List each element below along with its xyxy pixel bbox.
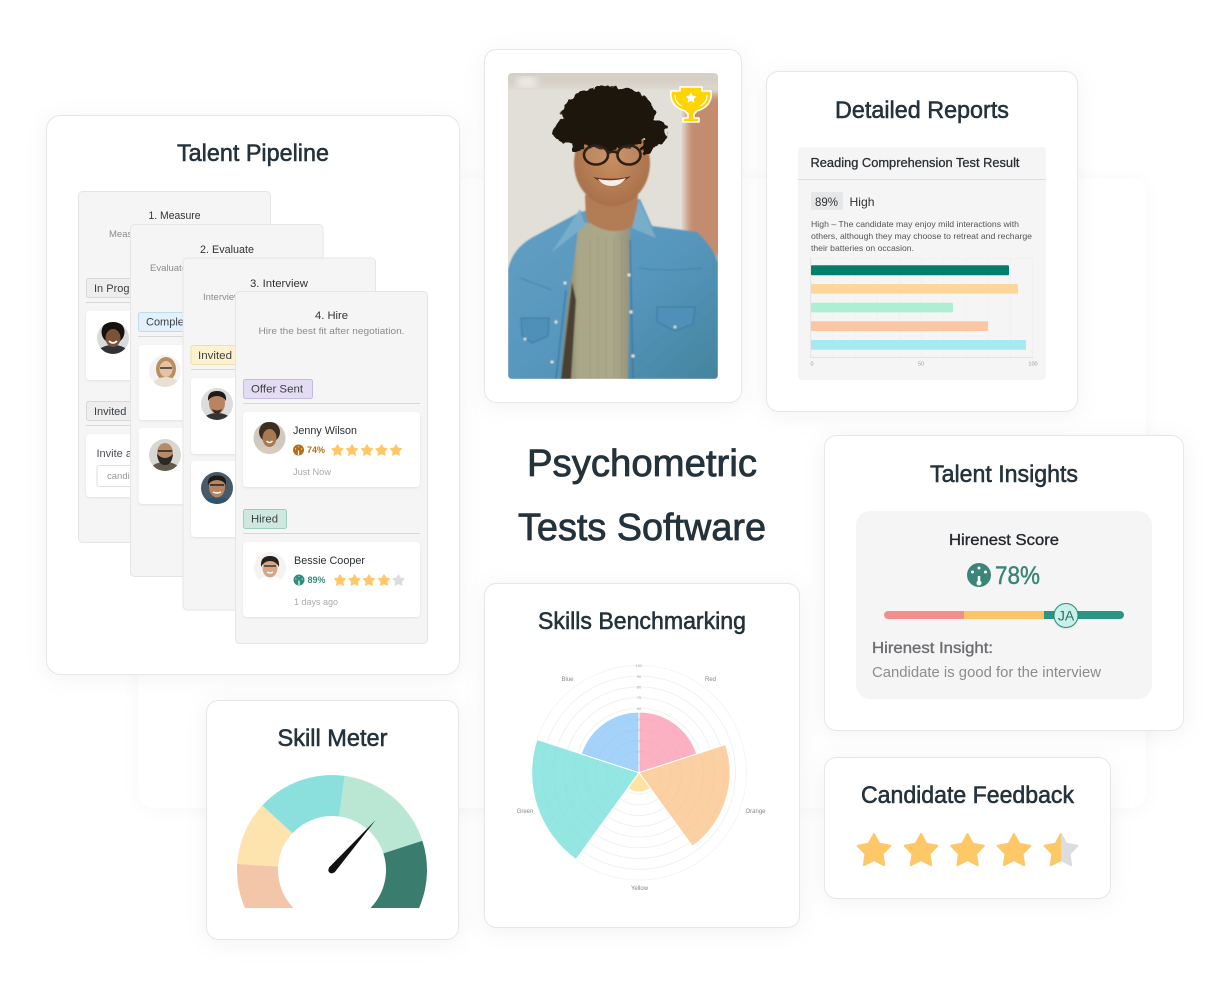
avatar: candidate 4 bbox=[201, 388, 233, 420]
smile bbox=[593, 176, 631, 182]
report card: High bbox=[850, 195, 874, 209]
column: hire: 4. Hire bbox=[315, 310, 348, 322]
candidate card: jenny wilson: Jenny Wilson bbox=[293, 425, 357, 437]
column: interview: Interview the candidates bbox=[203, 292, 306, 303]
avatar: candidate 2 bbox=[149, 355, 181, 387]
t-shirt bbox=[561, 222, 630, 379]
column: measure bbox=[78, 192, 270, 542]
polar area chart: 40 bbox=[637, 728, 642, 732]
tag: hired: Hired bbox=[251, 514, 278, 526]
score bar: JA bbox=[1058, 608, 1075, 624]
glasses bbox=[584, 146, 640, 164]
heading: skill meter: Skill Meter bbox=[278, 725, 388, 752]
column: measure: Invited bbox=[94, 406, 126, 418]
candidate card: jenny wilson: Just Now bbox=[293, 467, 332, 477]
polar area chart: 10 bbox=[637, 760, 642, 765]
hirenest score box bbox=[856, 511, 1152, 699]
candidate card: bessie cooper: 89% bbox=[308, 575, 326, 586]
column: evaluate: Completed bbox=[146, 316, 199, 328]
icon: score gauge bbox=[967, 563, 991, 587]
heading: talent pipeline: Talent Pipeline bbox=[177, 140, 329, 167]
hirenest score box: Hirenest Score bbox=[949, 532, 1059, 549]
tag: offer sent bbox=[244, 380, 312, 398]
hirenest score box: Hirenest Insight: bbox=[872, 640, 993, 657]
bar chart: 50 bbox=[918, 362, 924, 368]
needle bbox=[328, 820, 376, 873]
panel: talent insights bbox=[824, 436, 1184, 730]
polar area chart: 50 bbox=[637, 717, 642, 722]
description: High – The candidate may enjoy mild interactions with bbox=[811, 219, 1019, 229]
hair bbox=[554, 86, 667, 154]
polar area chart: Green bbox=[517, 809, 533, 815]
polar area chart: 30 bbox=[637, 738, 642, 744]
bar chart: 0 bbox=[810, 362, 814, 368]
bar chart: 100 bbox=[1028, 362, 1038, 368]
column: evaluate bbox=[130, 224, 323, 576]
polar area chart: Yellow bbox=[631, 886, 649, 892]
heading: candidate feedback: Candidate Feedback bbox=[861, 782, 1075, 809]
candidate card: bessie cooper bbox=[243, 542, 420, 617]
rating stars bbox=[858, 834, 1077, 865]
column: measure: Invite a candidate bbox=[96, 448, 183, 460]
avatar: bessie cooper bbox=[254, 552, 286, 580]
face bbox=[573, 138, 651, 206]
panel: candidate feedback bbox=[824, 758, 1110, 898]
polar area chart: 100 bbox=[636, 663, 643, 668]
description: others, although they may choose to retreat and recharge bbox=[811, 231, 1032, 241]
tag: hired bbox=[244, 510, 286, 528]
column: measure: 1. Measure bbox=[148, 210, 200, 222]
heading: talent insights: Talent Insights bbox=[930, 461, 1078, 488]
polar area chart: 70 bbox=[637, 695, 642, 700]
report card bbox=[798, 147, 1046, 380]
background panel bbox=[138, 178, 1146, 808]
icon: score gauge bbox=[294, 574, 304, 586]
trophy icon bbox=[671, 87, 711, 122]
rating stars bbox=[332, 445, 402, 455]
column: interview: Invited bbox=[198, 350, 232, 362]
column: interview: 3. Interview bbox=[250, 278, 308, 290]
polar area chart: 80 bbox=[637, 684, 642, 690]
avatar: candidate 5 bbox=[201, 472, 233, 504]
icon: score gauge bbox=[293, 444, 304, 456]
column: hire: Hire the best fit after negotiation. bbox=[258, 326, 404, 337]
score bar bbox=[884, 604, 1124, 628]
polar area chart: 90 bbox=[637, 674, 642, 679]
gauge bbox=[237, 775, 427, 908]
neck bbox=[585, 195, 638, 231]
score chip bbox=[811, 192, 843, 210]
heading: detailed reports: Detailed Reports bbox=[835, 97, 1009, 124]
polar area chart: 20 bbox=[637, 749, 642, 754]
tag: offer sent: Offer Sent bbox=[251, 384, 303, 396]
column: evaluate: 2. Evaluate bbox=[200, 244, 254, 256]
candidate card: bessie cooper: Bessie Cooper bbox=[294, 555, 365, 567]
rating stars bbox=[334, 575, 404, 585]
candidate card: jenny wilson bbox=[243, 412, 420, 487]
column: measure: Measure candidates bbox=[109, 229, 195, 240]
avatar: candidate 1 bbox=[97, 322, 129, 354]
title: Tests Software bbox=[518, 507, 766, 549]
photo: smiling candidate bbox=[508, 73, 718, 379]
denim shirt bbox=[508, 199, 718, 379]
report card: Reading Comprehension Test Result bbox=[810, 155, 1020, 170]
candidate card: bessie cooper: 1 days ago bbox=[294, 597, 338, 607]
column: measure: In Progress bbox=[94, 283, 151, 295]
panel: skills benchmarking bbox=[484, 584, 800, 928]
polar area chart: Red bbox=[705, 677, 716, 683]
panel: talent pipeline bbox=[46, 116, 460, 674]
hirenest score box: Candidate is good for the interview bbox=[872, 665, 1102, 681]
title bbox=[518, 443, 766, 549]
avatar: candidate 3 bbox=[149, 439, 181, 471]
collar bbox=[552, 209, 585, 252]
panel: detailed reports bbox=[766, 72, 1078, 412]
report card: 89% bbox=[815, 195, 838, 209]
avatar: jenny wilson bbox=[254, 422, 286, 454]
column: interview bbox=[183, 258, 376, 610]
candidate card: jenny wilson: 74% bbox=[307, 445, 326, 456]
column: evaluate: Evaluate with tests bbox=[150, 263, 229, 274]
bar chart bbox=[810, 258, 1038, 368]
heading: skills benchmarking: Skills Benchmarking bbox=[538, 608, 746, 635]
column: hire bbox=[236, 292, 428, 644]
description bbox=[811, 219, 1032, 253]
polar area chart: Orange bbox=[745, 809, 766, 815]
polar area chart: 60 bbox=[637, 706, 642, 711]
hirenest score box: 78% bbox=[995, 562, 1040, 590]
title: Psychometric bbox=[527, 443, 757, 485]
description: their batteries on occasion. bbox=[811, 243, 914, 253]
panel: skill meter bbox=[206, 700, 458, 952]
panel: candidate photo bbox=[484, 50, 742, 402]
polar area chart bbox=[517, 663, 766, 892]
polar area chart: Blue bbox=[561, 677, 574, 683]
column: measure: candidate email bbox=[107, 471, 174, 482]
